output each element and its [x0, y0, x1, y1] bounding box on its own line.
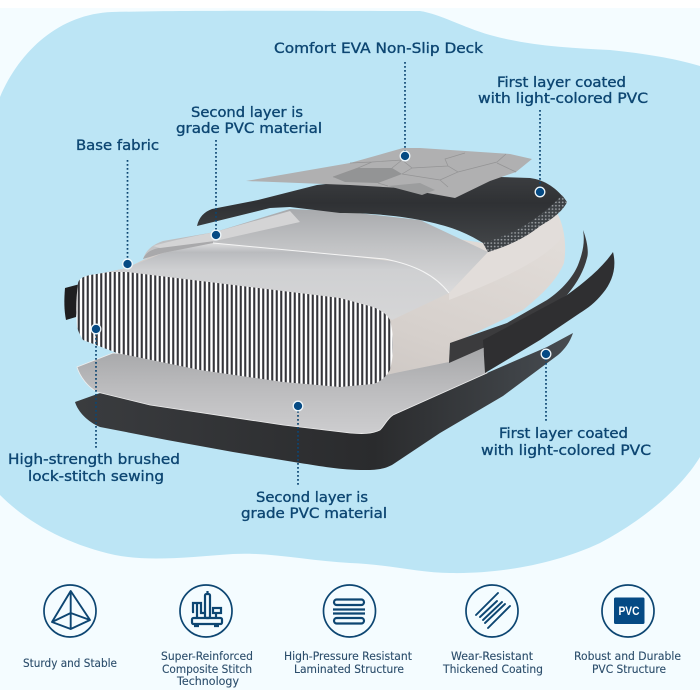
label: base fabric: Base fabric — [76, 138, 159, 154]
label: second layer top: Second layer is — [191, 105, 303, 121]
upper dark PVC layer — [197, 177, 567, 252]
label: first layer top — [478, 75, 648, 107]
perforated edge of upper dark layer — [483, 195, 567, 252]
upper layer white edge — [213, 243, 449, 293]
label: comfort deck: Comfort EVA Non-Slip Deck — [274, 41, 484, 57]
board body — [83, 212, 565, 386]
icon: pyramid — [44, 585, 96, 637]
label: second layer bottom — [241, 490, 387, 522]
icon: PVC badge: PVC — [618, 606, 640, 618]
label: second layer top: grade PVC material — [176, 121, 322, 137]
striped end panel — [76, 272, 393, 387]
caption: stitch — [161, 649, 253, 688]
caption: PVC: PVC Structure — [592, 662, 666, 676]
icon: PVC badge — [602, 585, 654, 637]
right dark strip one — [449, 230, 588, 363]
caption: stitch: Super-Reinforced — [161, 649, 253, 663]
upper grey PVC layer — [143, 209, 488, 293]
caption: coating: Thickened Coating — [442, 662, 543, 676]
caption: coating — [442, 649, 543, 676]
caption: stitch: Composite Stitch — [162, 662, 252, 676]
bottom dark PVC layer — [75, 333, 573, 470]
icon: coating hatch — [466, 585, 518, 637]
label: first layer bottom: First layer coated — [499, 426, 628, 442]
right dark strip two — [483, 252, 614, 373]
leader line: base fabric — [126, 160, 128, 259]
caption: sturdy: Sturdy and Stable — [23, 656, 117, 670]
body top surface — [83, 243, 449, 320]
label: first layer bottom: with light-colored PVC — [481, 443, 651, 459]
label: first layer bottom — [481, 426, 651, 459]
caption: stitch: Technology — [176, 674, 239, 688]
caption: PVC: Robust and Durable — [574, 649, 681, 663]
leader line: second layer bottom — [297, 411, 299, 485]
icon: stitching machine — [180, 585, 232, 637]
label: first layer top: with light-colored PVC — [478, 91, 648, 107]
label: second layer bottom: Second layer is — [256, 490, 368, 506]
label: first layer top: First layer coated — [497, 75, 626, 91]
layered board illustration — [64, 148, 614, 470]
label: second layer top — [176, 105, 322, 137]
label: stitch: High-strength brushed — [8, 452, 180, 468]
leader line: stitch — [95, 334, 97, 449]
caption: laminated: High-Pressure Resistant — [284, 649, 412, 663]
icon: laminated layers — [324, 585, 376, 637]
label: second layer bottom: grade PVC material — [241, 506, 387, 522]
grey EVA deck sheet — [246, 148, 532, 198]
leader line: first layer top — [539, 110, 541, 188]
leader line: second layer top — [215, 140, 217, 230]
label: stitch: lock-stitch sewing — [28, 469, 164, 485]
label: stitch — [8, 452, 180, 485]
leader line: first layer bottom — [545, 359, 547, 423]
marker dots — [91, 151, 551, 411]
upper left flap top — [153, 211, 300, 248]
caption: laminated: Laminated Structure — [294, 662, 404, 676]
upper layer flap underside — [143, 241, 213, 259]
dark rear tab — [64, 284, 80, 320]
bottom grey PVC layer — [77, 345, 487, 434]
caption: coating: Wear-Resistant — [451, 649, 533, 663]
leader line: deck — [404, 62, 406, 151]
caption: laminated — [284, 649, 412, 676]
body rim highlight — [449, 213, 560, 300]
caption: PVC — [574, 649, 681, 676]
